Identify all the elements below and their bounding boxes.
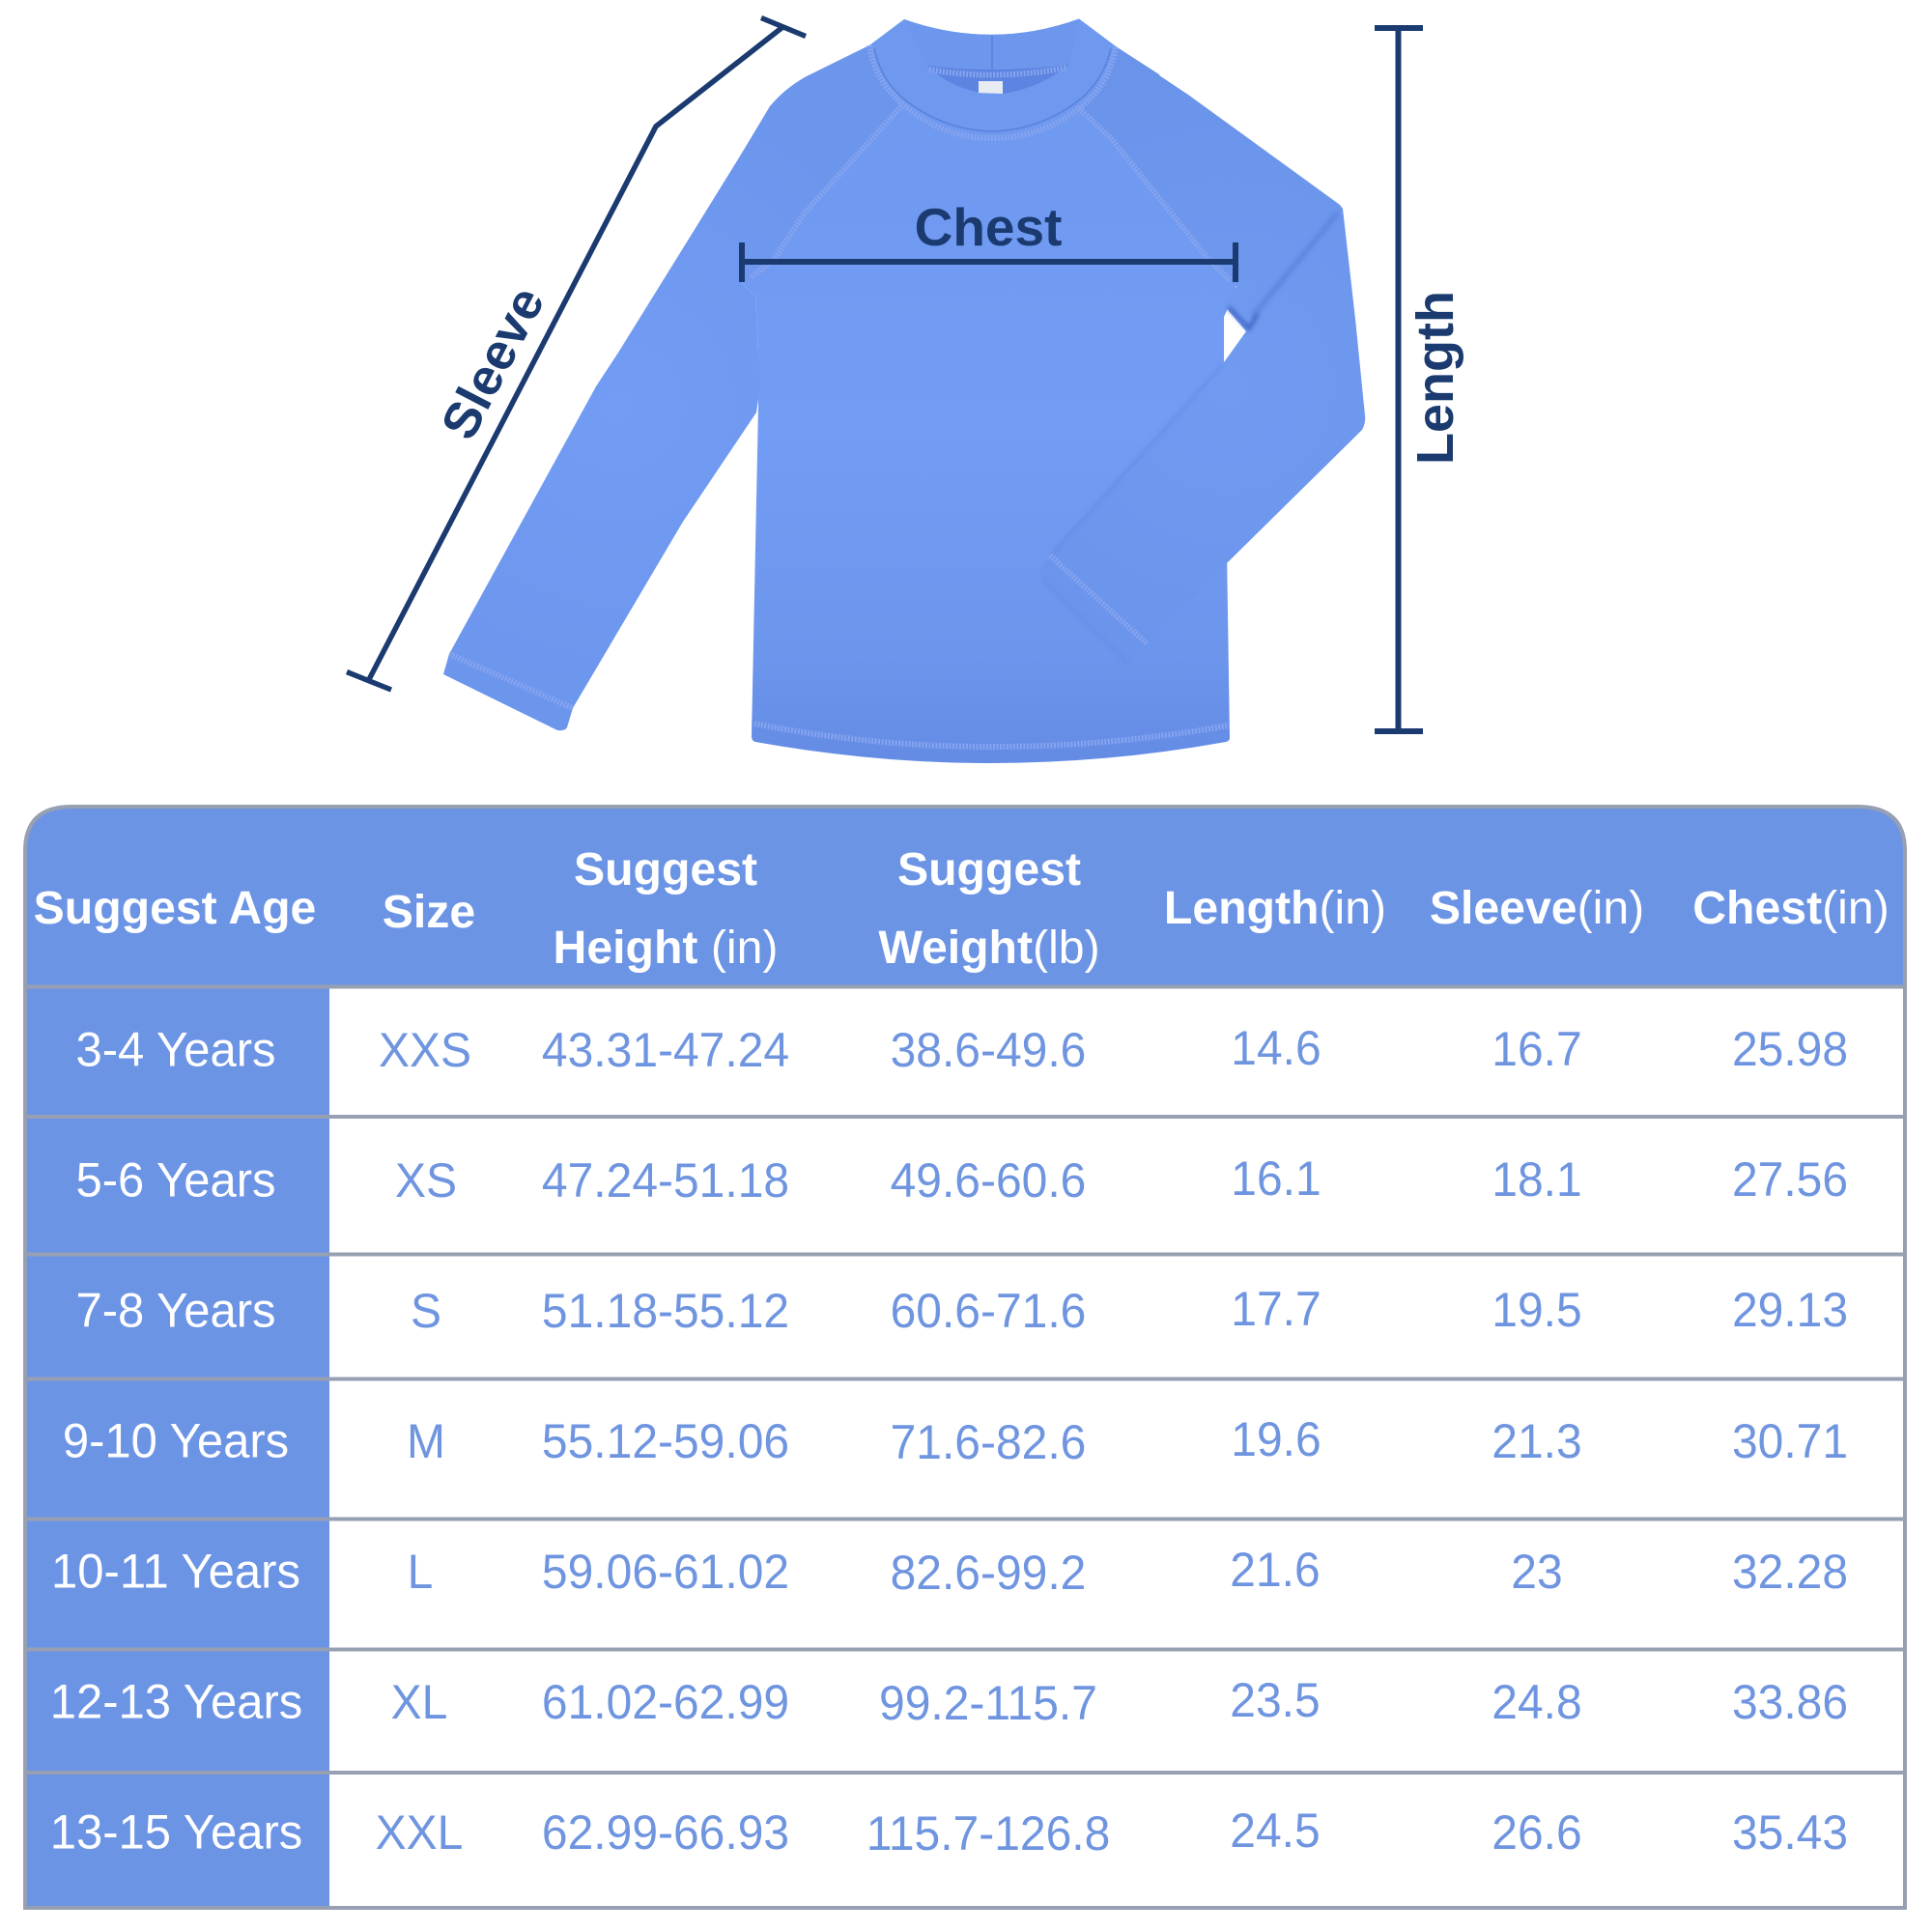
measurement: sleeve line [347,17,806,690]
table background [25,807,1905,1908]
row: 10-11 Years [51,1544,1848,1600]
row: 13-15 Years: 13-15 Years [50,1805,302,1860]
header row [34,843,1889,974]
header row: Sleeve(in) [1430,882,1644,934]
row: 9-10 Years: 21.3 [1492,1415,1582,1468]
label: Chest: Chest [915,197,1062,257]
row: 5-6 Years: 16.1 [1231,1152,1321,1206]
row: 3-4 Years: 25.98 [1732,1023,1848,1076]
header row: Suggest [897,843,1081,895]
row: 13-15 Years: 24.5 [1230,1804,1321,1858]
row: 13-15 Years: 62.99-66.93 [542,1806,789,1860]
header row: Suggest [574,843,757,895]
row: 13-15 Years: 35.43 [1732,1806,1848,1860]
row: 9-10 Years: 19.6 [1231,1413,1321,1466]
table grid lines [25,807,1905,1908]
row: 9-10 Years: 55.12-59.06 [542,1415,789,1468]
row: 3-4 Years: 3-4 Years [75,1023,276,1077]
header row: Chest(in) [1692,882,1889,934]
illustration: blue long-sleeve rash guard shirt [443,19,1365,763]
row: 13-15 Years [50,1804,1848,1861]
row: 10-11 Years: 23 [1511,1546,1563,1599]
row: 5-6 Years: 5-6 Years [75,1153,276,1208]
right sleeve crease shadow [1253,213,1338,316]
row: 9-10 Years [63,1413,1848,1469]
row: 7-8 Years: S [411,1285,441,1338]
row: 3-4 Years: 16.7 [1492,1023,1582,1076]
header row: Height (in) [554,922,778,974]
neck tag [979,81,1003,94]
neck opening [927,65,1069,94]
header row: Suggest Age [34,882,316,934]
row: 12-13 Years: 61.02-62.99 [542,1676,789,1729]
row: 7-8 Years: 29.13 [1732,1284,1848,1337]
underarm shadow [1229,307,1258,328]
row: 5-6 Years: 18.1 [1492,1153,1582,1207]
shadow below collar [889,134,1092,138]
header row: Weight(lb) [878,922,1100,974]
row: 10-11 Years: 10-11 Years [51,1545,300,1599]
row: 5-6 Years: 27.56 [1732,1153,1848,1207]
row: 3-4 Years: 38.6-49.6 [891,1024,1086,1077]
header row: Size [383,886,475,938]
row: 13-15 Years: 26.6 [1492,1806,1582,1860]
header row: Length(in) [1164,882,1386,934]
row: 5-6 Years: XS [395,1154,457,1208]
left sleeve [443,45,901,730]
row: 9-10 Years: M [407,1415,445,1468]
row: 13-15 Years: XXL [376,1806,463,1860]
row: 5-6 Years: 49.6-60.6 [891,1154,1086,1208]
collar and raglan stitching [449,36,1230,747]
header band [25,807,1905,986]
label: Sleeve: Sleeve [431,278,555,448]
row: 10-11 Years: 82.6-99.2 [891,1547,1086,1600]
row: 10-11 Years: 21.6 [1230,1544,1321,1597]
row: 12-13 Years: 24.8 [1492,1676,1582,1729]
right sleeve [1038,46,1365,660]
row: 12-13 Years: 23.5 [1230,1674,1321,1727]
row: 9-10 Years: 9-10 Years [63,1414,289,1468]
row: 5-6 Years [75,1152,1848,1208]
row: 7-8 Years: 7-8 Years [75,1284,276,1338]
row: 7-8 Years: 17.7 [1231,1283,1321,1336]
row: 12-13 Years: XL [391,1676,447,1729]
row: 10-11 Years: L [408,1546,433,1599]
row: 3-4 Years: XXS [379,1024,471,1077]
front collar [869,19,1116,138]
panel: size table [25,807,1905,1908]
row: 5-6 Years: 47.24-51.18 [542,1154,789,1208]
row: 3-4 Years: 43.31-47.24 [542,1024,789,1077]
row: 9-10 Years: 71.6-82.6 [891,1416,1086,1469]
row: 10-11 Years: 32.28 [1732,1546,1848,1599]
row: 7-8 Years: 51.18-55.12 [542,1285,789,1338]
row: 9-10 Years: 30.71 [1732,1415,1848,1468]
label: Length: Length [1406,291,1464,465]
row: 7-8 Years: 60.6-71.6 [891,1285,1086,1338]
shadow under right cuff and forearm [1041,365,1222,663]
row: 12-13 Years: 12-13 Years [50,1675,302,1729]
row: 12-13 Years: 99.2-115.7 [879,1677,1097,1730]
row: 12-13 Years [50,1674,1848,1730]
shirt body [742,19,1236,763]
measurement: length line [1375,28,1423,731]
row: 3-4 Years: 14.6 [1231,1022,1321,1075]
measurement: chest line [741,242,1236,282]
row: 13-15 Years: 115.7-126.8 [867,1807,1110,1861]
age column band [25,986,329,1908]
row: 12-13 Years: 33.86 [1732,1676,1848,1729]
row: 7-8 Years [75,1283,1848,1338]
row: 3-4 Years [75,1022,1848,1077]
row: 7-8 Years: 19.5 [1492,1284,1582,1337]
back collar band [904,19,1079,68]
row: 10-11 Years: 59.06-61.02 [542,1546,789,1599]
